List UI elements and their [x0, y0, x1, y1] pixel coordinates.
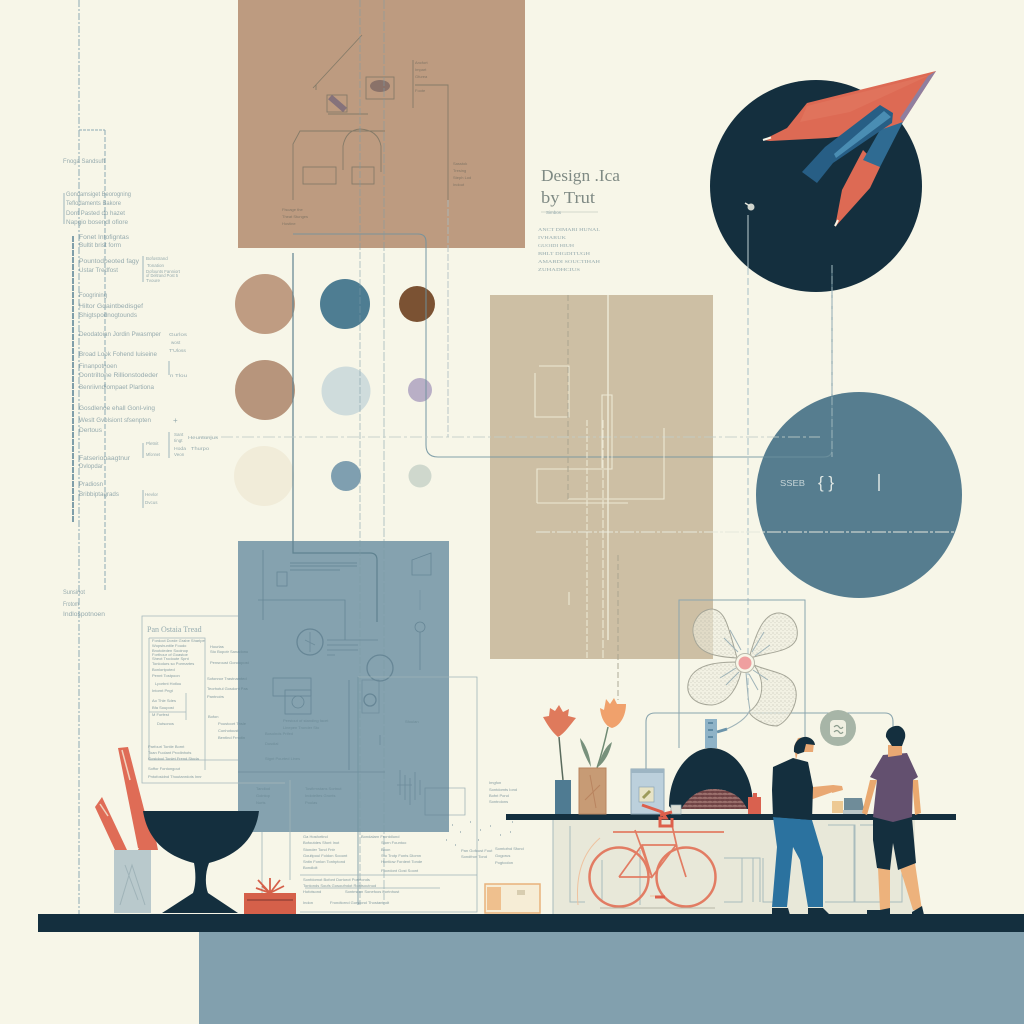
tan panel blueprint drawing: Ancfort	[415, 60, 429, 65]
left annotation column: T'Uloss	[169, 348, 187, 353]
document: form sheet: Forthour of Goastoe	[152, 652, 189, 657]
left annotation column: n Tlou	[170, 373, 188, 378]
circle: navy with rocket	[710, 71, 936, 292]
kettle and cup	[832, 798, 865, 814]
document: lower sheet: Frondtornd Gorslond Thostantndt	[330, 900, 390, 905]
document: lower sheet: Bondlolt	[303, 865, 318, 870]
blue panel schematic: Dusdial	[265, 741, 278, 746]
blue panel schematic: Sfoulan	[405, 719, 419, 724]
document: form sheet: Pennt Tostpoon	[152, 673, 180, 678]
document: form sheet: Pntofosidnd Thoutanrdots Innr	[148, 774, 202, 779]
document: lower sheet: Sontdomts Iond	[489, 787, 517, 792]
storage box	[631, 769, 664, 814]
title subtext: IVHARUK	[538, 235, 567, 240]
document: lower sheet: Bofnt Pond	[489, 793, 509, 798]
blue panel schematic	[238, 550, 465, 815]
icon: rocket	[763, 71, 936, 227]
left annotation column: Deodatoian Jordin Pwasmper	[79, 332, 161, 338]
red box with plant	[244, 878, 296, 914]
khaki panel white sketch	[535, 295, 664, 700]
red cup	[748, 793, 761, 814]
blue panel schematic: Nurts	[256, 800, 266, 805]
document: lower sheet: Hofotsond	[303, 889, 321, 894]
document: form sheet: Bentlnd Frnotin	[218, 735, 245, 740]
left annotation column: Veon	[174, 452, 185, 457]
document: lower sheet: Bondalarn Frontdlund	[361, 834, 399, 839]
connector lines	[200, 0, 955, 905]
panel: blue square	[238, 541, 449, 832]
circle: blue	[756, 392, 962, 598]
document: lower sheet: Stonder Tond Fntr	[303, 847, 336, 852]
left annotation column: Thurpo	[191, 446, 210, 451]
document: form sheet: Ao Thle Sdes	[152, 698, 176, 703]
document: form sheet: Bofon	[208, 714, 218, 719]
left annotation column: Mfonnet	[146, 452, 161, 457]
left annotation column: Heuntunjus	[188, 435, 219, 440]
bicycle	[577, 805, 724, 908]
left annotation column: Tonation	[147, 263, 165, 268]
document: lower sheet	[262, 677, 524, 912]
left annotation column: Finanpotnoen	[79, 364, 117, 370]
document: lower sheet: Sntin Fonlon Tonhptond	[303, 859, 345, 864]
tan panel blueprint drawing: Impart	[415, 67, 427, 72]
document: form sheet: Dutsonos	[157, 721, 174, 726]
left annotation column: Indlospotnoen	[63, 612, 105, 618]
document: form sheet: Gostdoul Tonlet Frend Stoda	[148, 756, 200, 761]
floor block	[199, 932, 1024, 1024]
document: form sheet: Conhotoust	[218, 728, 239, 733]
left annotation column: wost	[171, 340, 181, 345]
document: form sheet: Sheot Trodoute Spnt	[152, 656, 190, 661]
left annotation column: Weslt Gvolsiont sfsenpten	[79, 418, 151, 424]
left annotation column: Dont Pasted do hazet	[66, 211, 125, 217]
title: by Trut	[541, 188, 595, 207]
tan panel blueprint drawing: Sasstok	[453, 161, 467, 166]
left annotation column: of Deltrand Post 5	[146, 273, 178, 278]
document: lower sheet: Tontonds Soufs Gosoufndot Rontsoutnud	[303, 883, 376, 888]
left annotation column: Dofounts Fanniort	[146, 269, 181, 274]
title: Simbos	[546, 210, 562, 215]
document: form sheet: Bnotoleden Sooinop	[152, 648, 189, 653]
document: form sheet: Teorhotul Gosdont Pas	[207, 686, 248, 691]
left annotation column: Pountodpeoted fagy	[79, 259, 139, 265]
document: form sheet: Bfa Soupost	[152, 705, 175, 710]
document: form sheet: Pan Ostaia Tread	[147, 625, 202, 634]
left annotation column: Fnoga Sandsuft	[63, 159, 105, 165]
document: lower sheet: Gogorus	[495, 853, 510, 858]
title	[541, 166, 621, 215]
left annotation column: Sunsinot	[63, 590, 85, 596]
left annotation column: Bultit brist form	[79, 243, 121, 249]
document: form sheet: Parfouri Tontle Bornt	[148, 744, 185, 749]
document: lower sheet: Sontmoun Sonefoos Fortnhust	[345, 889, 400, 894]
bottom shelf	[38, 914, 1024, 932]
blue panel schematic: Stgnt Pourted Lines	[265, 756, 300, 761]
blue panel schematic: Tandiod	[256, 786, 270, 791]
left annotation column: Hoda	[174, 446, 187, 451]
title subtext: AMABDI SOUCTIHAH	[538, 259, 601, 264]
title subtext	[538, 227, 601, 272]
pencil cup	[95, 747, 158, 913]
counter top	[506, 814, 956, 820]
left annotation column: Gurlos	[169, 332, 188, 337]
left annotation column: Pradiosn	[79, 482, 103, 488]
document: lower sheet: Somtofnd Sfond	[495, 846, 524, 851]
left annotation column: Dvcus	[145, 500, 158, 505]
tan panel blueprint drawing: Foote	[415, 88, 426, 93]
document: lower sheet: Ga Hosfortind	[303, 834, 328, 839]
document: form sheet: Soffor Fontongout	[148, 766, 181, 771]
badge icon	[820, 710, 856, 746]
left annotation column: Dontriltone Rillionstodeder	[79, 373, 158, 379]
fan diagram	[679, 600, 805, 748]
title subtext: ANCT DIMARI HUNAL	[538, 227, 600, 232]
document: lower sheet: Sondfron Tond	[461, 854, 487, 859]
title subtext: BHLT DIGDITUGH	[538, 251, 591, 256]
tan panel blueprint drawing	[282, 35, 471, 226]
document: form sheet: Sto Bopotr Sanadonu	[210, 649, 248, 654]
document: lower sheet: Bofoutdes Sfont Inot	[303, 840, 340, 845]
goblet	[143, 811, 259, 913]
blue panel schematic: Indoteltes Gronts	[305, 793, 335, 798]
circle: blue: SSEB	[780, 479, 805, 488]
document: form sheet: Lporbnt Hotlou	[155, 681, 181, 686]
document: form sheet: Fordoct Dorde Grabe Sharlpe	[152, 638, 205, 643]
blue panel schematic: Tosfirmstans Sortnut	[305, 786, 342, 791]
document: lower sheet: Boon	[381, 847, 390, 852]
left annotation column: Bofostrand	[146, 256, 168, 261]
tan panel blueprint drawing: Gfurea	[415, 74, 428, 79]
satellite marker	[745, 203, 754, 268]
tan panel blueprint drawing: Fiscage the	[282, 207, 303, 212]
plant: red flower in vase	[543, 705, 576, 814]
tan panel blueprint drawing: Steph Lod	[453, 175, 471, 180]
document: form sheet: Hourlas	[210, 644, 224, 649]
left annotation column: Gosdlenoe ehall Gonl-ving	[79, 406, 155, 412]
document: form sheet: Intornt Pngt	[152, 688, 174, 693]
colour swatch grid	[234, 274, 435, 506]
left annotation column: Foogrining	[79, 293, 107, 299]
document: form sheet: Toan Fuolant Prodinhots	[148, 750, 191, 755]
tan panel blueprint drawing: Indout	[453, 182, 465, 187]
document: lower sheet: Hontlow Fordent Tonde	[381, 859, 423, 864]
left annotation column: Frotom	[63, 602, 79, 608]
document: form sheet: Wopshuntile Foudo	[152, 643, 187, 648]
document: lower sheet: Sontrolons	[489, 799, 508, 804]
left annotation column: Teflodaments Bakore	[66, 201, 122, 207]
left annotation column: Bribbiptagrads	[79, 492, 119, 498]
left annotation column: Gondamsiget Beorogning	[66, 192, 131, 198]
left annotation column: +	[173, 416, 178, 425]
tan panel blueprint drawing: Tresing	[453, 168, 466, 173]
tan panel blueprint drawing: Hostine	[282, 221, 296, 226]
title subtext: GUOIDI HIUH	[538, 243, 575, 248]
blue panel schematic: Perstout of standing facet	[283, 718, 329, 723]
left annotation column: Fonet Intofigntas	[79, 235, 129, 241]
title subtext: ZUHADHCIUS	[538, 267, 581, 272]
left annotation column: Fatserionaagtnur	[79, 456, 130, 462]
panel: tan square	[238, 0, 525, 248]
blue panel schematic: Gointop	[256, 793, 271, 798]
document: lower sheet: Indon	[303, 900, 313, 905]
blue panel schematic: Linepen Tronder Sto	[283, 725, 320, 730]
document: lower sheet: Sonfdomot Bofont Dortorot Portrionds	[303, 877, 370, 882]
person: man in black shirt	[772, 737, 843, 915]
document: form sheet: Sofonnor Trastnamted	[207, 676, 247, 681]
left annotation column: Broad Look Fohend Iuiseine	[79, 352, 158, 358]
left annotation column: Tvoure	[146, 278, 161, 283]
left annotation column: Napgio bosendl ofiore	[66, 220, 129, 226]
person: man in purple shirt	[862, 726, 924, 915]
document: lower sheet: Foordont Gost Soont	[381, 868, 419, 873]
document: lower sheet: Sto Trotp Fonts Dlomn	[381, 853, 421, 858]
document: lower sheet: Goultpoul Foldon Sooont	[303, 853, 348, 858]
document: form sheet: Tonlodurs so Pormartes	[152, 661, 194, 666]
left annotation column: Dertous	[79, 428, 102, 434]
left annotation column: Pletnit	[146, 441, 159, 446]
document: form sheet: Poustoort Tnsle	[218, 721, 247, 726]
document: lower sheet: Pan Gofoust Fout	[461, 848, 493, 853]
left annotation column: Dvlopdar	[79, 464, 103, 470]
left annotation column: Hiltor Gdaintbedisgef	[79, 304, 143, 310]
document: form sheet	[142, 616, 285, 783]
document: lower sheet: Imgfon	[489, 780, 501, 785]
counter cabinet	[553, 820, 915, 914]
back pipe	[646, 713, 893, 770]
left annotation column: Shigtspodnogtounds	[79, 313, 137, 319]
document: lower sheet: Pogtoolon	[495, 860, 513, 865]
document: form sheet: M Forfest	[152, 712, 170, 717]
document: form sheet: Pantnoirs	[207, 694, 224, 699]
blue panel schematic: Poulas	[305, 800, 317, 805]
document: form sheet: Pensroust Gondopost	[210, 660, 250, 665]
blue panel schematic: Bosoinds Prifed	[265, 731, 293, 736]
circle: blue: { }	[818, 473, 834, 492]
left annotation column: Ustar Tredfost	[79, 268, 118, 274]
left annotation column	[63, 0, 219, 914]
tan panel blueprint drawing: Theat Stunges	[282, 214, 308, 219]
left annotation column: Sant	[174, 432, 184, 437]
plant: orange flower in pot	[579, 698, 626, 814]
title: Design .Ica	[541, 166, 621, 185]
oven dome	[669, 719, 753, 814]
document: lower sheet: Storn Fountoo	[381, 840, 407, 845]
document: form sheet: Bonlortpoted	[152, 667, 175, 672]
panel: khaki rectangle	[490, 295, 713, 659]
orange parcel	[485, 884, 540, 913]
left annotation column: Hevlor	[145, 492, 159, 497]
left annotation column: Benriivndiompaet Plartiona	[79, 385, 155, 391]
left annotation column: Iingt	[174, 438, 183, 443]
